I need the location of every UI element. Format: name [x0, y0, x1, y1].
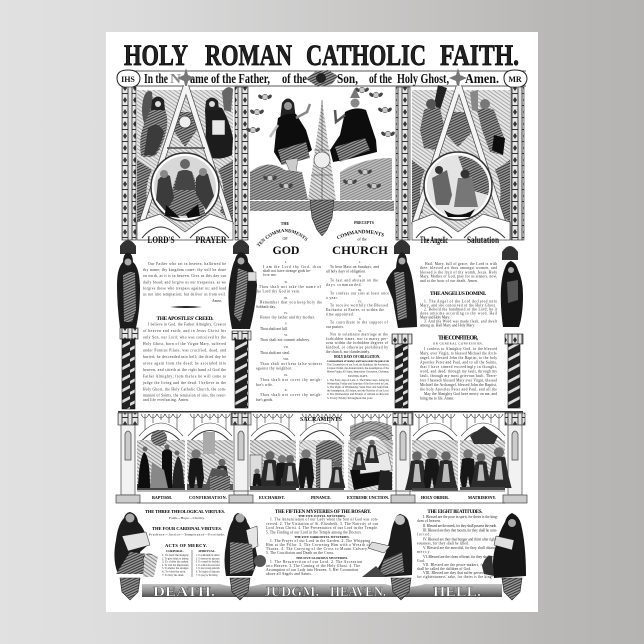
title [124, 39, 519, 72]
cloud of cherubs right [340, 158, 392, 200]
text: Hail Mary: and at the hour of our death. Amen. [420, 279, 478, 283]
text: beatitudes: II. Blessed are the meek, for they shall possess the earth. [423, 524, 497, 529]
scene: Eucharist [250, 414, 300, 490]
text: Hail Mary: thee; blessed art thou amongst women, and [420, 266, 497, 271]
label: Penance: PENANCE. [311, 495, 331, 500]
text: Acts of Mercy columns: 6. To forgive all injuries. [196, 570, 220, 574]
text: Lord's Prayer: Our Father who art in heaven, hallowed be [148, 262, 226, 267]
text: Lord's Prayer: thy name; thy kingdom come; thy will be done [143, 268, 226, 272]
statue: right bishop [386, 252, 417, 328]
text: holy days: 5. Every Friday throughout the year. [327, 396, 373, 400]
text: Apostles' Creed: buried; he descended into hell; the third day he [143, 355, 226, 359]
text: Confiteor [420, 347, 498, 400]
text: precepts of the Church: days commanded. [326, 283, 362, 287]
invocation line: of the [282, 72, 307, 87]
text: Apostles' Creed: and life everlasting. Amen. [143, 398, 189, 402]
emblem: MR medallion: MR [508, 75, 522, 84]
invocation line: N [170, 72, 181, 87]
banner: Last Things [120, 578, 522, 600]
lace band [250, 201, 394, 211]
scene: Confirmation [187, 414, 233, 490]
text: Confiteor: May the Almighty God have mercy on me, and [424, 392, 497, 397]
text: Angelus: Mary and Holy Mary. [420, 316, 450, 320]
invocation line: In the [144, 72, 168, 87]
text: Angelus: done unto me according to thy word. Hail [420, 312, 497, 316]
roundel: holy family [151, 153, 219, 221]
text: precepts of the Church: kindred, or otherwise prohibited by [326, 346, 388, 350]
text: Lord's Prayer [143, 262, 227, 303]
text: Apostles' Creed: under Pontius Pilate, was crucified, dead, and [143, 348, 226, 354]
figure: evangelist Luke [362, 514, 412, 577]
text: Acts of Mercy columns: 7. To pray for the living. [196, 573, 218, 577]
text: commandments: Thou shalt not covet thy neigh- [260, 378, 323, 382]
text: commandments [256, 260, 323, 402]
text: commandments: Thou shalt not bear false witness [260, 362, 323, 366]
text: Lord's Prayer: on earth, as it is in heaven. Give us this day our [143, 274, 227, 279]
text: commandments: I. [285, 260, 287, 264]
text: commandments: VIII. [283, 357, 289, 361]
heading: Acts of Mercy: ACTS OF MERCY. [165, 543, 207, 548]
text: sorrowful mysteries [266, 535, 371, 555]
text: holy days: 1. The Forty days of Lent. 2. The Ember days, being the [327, 378, 390, 382]
text: commandments: fore me. [263, 273, 277, 277]
text: beatitudes: mercy. [417, 550, 431, 554]
heading: Three Theological Virtues: THE THREE THEOLOGICAL VIRTUES. [145, 509, 225, 514]
text: Lord's Prayer: forgive those who trespass against us; and lead [143, 286, 226, 290]
text: commandments: III. [284, 296, 288, 300]
text: Confiteor: Apostles Peter and Paul, and to all the Saints, [420, 360, 497, 366]
text: beatitudes: I. Blessed are the poor in spirit, for theirs is the king- [423, 515, 499, 520]
text: holy days: Corpus Christi, the Annunciation, the Assumption of the [327, 366, 390, 370]
text: beatitudes: III. Blessed are they that mourn, for they shall be com- [423, 528, 498, 534]
text: sorrowful mysteries: Him at the Pillar. 3. The Crowning Him with a Wreath of [266, 543, 371, 547]
title: CATHOLIC [306, 39, 426, 72]
text: commandments: I am the Lord thy God, thou [263, 265, 321, 270]
heading: Ten Commandments of God: THE [281, 221, 290, 226]
text: glorious mysteries: Assumption of our Lady into Heaven. 5. Her Coronation [266, 568, 358, 572]
text: beatitudes: VIII. Blessed are they that suffer persecution [423, 571, 491, 575]
pillar: outer right [511, 87, 524, 240]
text: precepts of the Church: a year. [326, 296, 338, 300]
text: Apostles' Creed: only Son, our Lord; who was conceived by the [143, 336, 226, 340]
ornament: shield 4 [502, 578, 522, 600]
title: HOLY [124, 39, 188, 72]
heading: Precepts of the Church: of the [357, 236, 367, 242]
label: Eucharist: EUCHARIST. [259, 495, 285, 500]
text: Angelus: 2. Behold the handmaid of the Lord; be it [424, 308, 497, 312]
angel: right [205, 87, 233, 159]
panel: right gable, Angelic Salutation [396, 85, 524, 246]
text: precepts of the Church: II. [359, 274, 362, 278]
text: beatitudes [417, 515, 499, 580]
text: Apostles' Creed: heaven, and sitteth at the right hand of God the [143, 368, 226, 373]
text: joyful mysteries: Lord Jesus Christ. 4. The Presentation of our Lord in the Temple. [266, 526, 378, 530]
text: Apostles' Creed: of heaven and earth; and in Jesus Christ his [143, 329, 227, 333]
text: Confiteor: the holy Apostles Peter and Paul, and all the [420, 388, 497, 392]
text: Apostles' Creed: munion of Saints, the remission of sins, the resur- [143, 394, 227, 398]
heading: The Confiteor: THE CONFITEOR, [438, 336, 478, 342]
text: precepts of the Church: Eucharist at Easter, or within the [326, 308, 384, 313]
text: joyful mysteries: 5. The Finding of our Lord in the Temple among the Doctors. [266, 530, 362, 534]
heading: Four Cardinal Virtues: THE FOUR CARDINAL VIRTUES. [152, 526, 222, 531]
text: commandments: Thou shalt not kill. [260, 327, 288, 331]
text: Acts of Mercy columns: 3. To counsel the doubtful. [196, 560, 220, 564]
text: sorrowful mysteries: Thorns. 4. The Carrying of the Cross to Mount Calvary. [266, 547, 368, 551]
text: glorious mysteries: into Heaven. 3. The Coming of the Holy Ghost. 4. The [266, 564, 360, 568]
cloud border arc [252, 88, 392, 202]
label: Salutation: Salutation [467, 236, 500, 246]
heading: Eight Beatitudes: THE EIGHT BEATITUDES. [428, 510, 482, 515]
text: Confiteor: that I have sinned exceedingly in thought, [420, 365, 497, 370]
spire: centre [308, 100, 336, 200]
text: beatitudes: forted. [417, 532, 431, 536]
tracery: corners [137, 160, 233, 222]
text: Angelus: 3. And the Word was made flesh, and dwelt [424, 320, 497, 324]
heading: Ten Commandments of God: TEN COMMANDMENTS [256, 228, 308, 247]
heading: The Angelus Domini: THE ANGELUS DOMINI. [430, 291, 487, 297]
subheading: general confession: OR GENERAL CONFESSION. [433, 342, 483, 346]
text: Confiteor: fore I beseech blessed Mary ever Virgin, blessed [420, 378, 497, 384]
central quatrefoil [173, 112, 197, 147]
text: Lord's Prayer: Amen. [212, 299, 222, 303]
ornament: star right [449, 68, 467, 90]
text: commandments: Thou shalt not covet thy neigh- [260, 393, 323, 397]
text: commandments: V. [285, 322, 288, 326]
text: Heaven: HEAVEN. [330, 585, 386, 600]
figure: God the Father [330, 88, 377, 162]
text: Hell: HELL. [433, 585, 481, 600]
text: Hail Mary: blessed is the fruit of thy womb, Jesus. Holy [420, 270, 497, 275]
text: precepts of the Church: To contribute to the support of [330, 320, 389, 324]
text: joyful mysteries: ceived. 2. The Visitation of St. Elizabeth. 3. The Nativity of our [266, 522, 379, 526]
text: commandments: IX. [284, 373, 288, 377]
ornament: star left [177, 68, 195, 90]
text: commandments: bor's goods. [256, 398, 273, 402]
scene: Holy Orders [405, 414, 458, 490]
column: fourth [505, 334, 523, 408]
invocation line: Son, [337, 72, 358, 87]
text: holy days: 4. The Wednesdays and Fridays of Advent as directed. [327, 392, 389, 396]
gable: A frame [141, 86, 231, 225]
lower lace arches [412, 214, 510, 240]
text: commandments: IV. [284, 311, 288, 315]
text: Acts of Mercy columns: 5. To shelter the stranger. [162, 566, 189, 570]
text: commandments: bor's wife. [256, 383, 273, 387]
scene: Baptism [137, 414, 185, 490]
text: beatitudes: for righteousness' sake, for theirs is the king- [417, 575, 494, 580]
angel: left [420, 85, 447, 150]
text: precepts of the Church: To confess our sins at least once [330, 292, 389, 296]
text: Apostles' Creed: arose again from the dead; he ascended into [143, 362, 226, 366]
caption rule [137, 491, 505, 503]
text: precepts of the Church: To receive worthily the Blessed [330, 304, 388, 308]
heading: Precepts of the Church: CHURCH [332, 245, 388, 257]
text: precepts of the Church: the church, nor clandestinely. [326, 350, 370, 355]
text: Acts of Mercy columns: 2. To instruct the ignorant. [196, 556, 220, 560]
text: Confiteor: fault, through my most grievous fault. There- [420, 374, 498, 379]
text: Confiteor: angel, to blessed John the Baptist, to the holy [420, 356, 497, 361]
text: precepts of the Church: all holy days of obligation. [326, 270, 366, 274]
text: holy days: the Assumption, All Saints, and the Nativity of our Lord. [327, 388, 389, 392]
text: holy days: The Circumcision of our Lord, the Epiphany, the Ascension, [327, 362, 389, 366]
text: Acts of Mercy columns: 2. To give drink to thirsty. [162, 556, 189, 560]
angel: right [470, 90, 505, 155]
text: Apostles' Creed: Father Almighty; from thence he will come to [143, 374, 226, 378]
pillar: inner left [235, 87, 248, 240]
text: precepts of the Church: III. [358, 288, 362, 292]
invocation line: of the [369, 72, 392, 87]
text: holy days: 3. The Vigils of Whitsunday, Saint Peter and Saint Paul, [327, 385, 389, 389]
central quatrefoil [444, 112, 472, 147]
text: Angelus: among us. Hail Mary and Holy Mary. [420, 324, 475, 328]
text: commandments: II. [285, 280, 288, 284]
text: commandments: Thou shalt not take the name of [259, 285, 322, 289]
text: commandments: Thou shalt not steal. [260, 351, 290, 355]
figure: evangelist John [482, 513, 526, 578]
text: precepts of the Church: V. [359, 317, 362, 321]
text: Apostles' Creed: I believe in God, the Father Almighty, Creator [148, 322, 227, 328]
divider flourish [170, 306, 202, 308]
text: commandments: Thou shalt not commit adultery. [260, 338, 310, 342]
text: Angelus [420, 300, 497, 328]
background lace [137, 90, 233, 240]
text: Hail Mary [420, 262, 497, 283]
text: Apostles' Creed: judge the living and the dead. I believe in the [142, 381, 226, 385]
text: commandments: the Lord thy God in vain. [256, 290, 300, 294]
text: Angelus: Mary, and she conceived of the Holy Ghost. [420, 304, 496, 308]
text: precepts of the Church: To fast and abstain on the [330, 278, 378, 282]
label: Matrimony: MATRIMONY. [468, 495, 496, 500]
text: precepts of the Church: time appointed. [326, 312, 354, 316]
text: glorious mysteries [266, 556, 362, 576]
text: virtues: Faith—Hope—Charity. [169, 516, 205, 520]
text: Confiteor: Mary, ever Virgin, to blessed Michael the Arch- [420, 352, 498, 356]
tracery: corners [412, 160, 510, 222]
text: Death: DEATH. [153, 585, 215, 600]
pillar: outer left [122, 87, 136, 240]
scene: Matrimony [460, 414, 512, 490]
text: Confiteor: I confess to Almighty God, to the blessed [424, 347, 497, 352]
heading: Holy Days of Obligation: HOLY DAYS OF OBLIGATION. [334, 355, 380, 359]
heading: Fifteen Mysteries of the Rosary: THE FIFTEEN MYSTERIES OF THE ROSARY. [275, 510, 371, 515]
text: Acts of Mercy columns: 1. To feed the hungry. [162, 553, 189, 557]
architecture: columns [116, 413, 527, 503]
text: holy days [327, 359, 390, 400]
text: Acts of Mercy columns: 7. To bury the dead. [162, 573, 184, 577]
heading: The Apostles' Creed: THE APOSTLES' CREED. [156, 316, 214, 322]
text: Confiteor: bring me to life. Amen. [420, 396, 454, 400]
panel: sacraments band [116, 411, 527, 503]
roundel: Annunciation [424, 152, 492, 220]
text: holy days: FASTING DAYS. [348, 374, 368, 378]
heading: Ten Commandments of God [256, 221, 308, 257]
scene: Penance [298, 414, 345, 490]
emblem: IHS medallion [117, 70, 140, 88]
text: glorious mysteries: above all Angels and Saints. [266, 572, 312, 576]
text: precepts of the Church: forbidden times, nor to marry per- [326, 337, 389, 342]
invocation line: ame of the Father, [190, 72, 270, 87]
label: Extreme Unction: EXTREME UNCTION. [347, 495, 389, 500]
heading: Precepts of the Church: COMMANDMENTS [337, 230, 384, 239]
text: sorrowful mysteries: THE FIVE SORROWFUL MYSTERIES. [294, 535, 350, 539]
text: beatitudes: IV. Blessed are they that hunger and thirst after right- [423, 538, 498, 542]
text: beatitudes: VI. Blessed are the clean of heart, for they shall see [423, 555, 495, 560]
label: Holy Orders: HOLY ORDER. [421, 495, 449, 500]
text: sorrowful mysteries: 1. The Prayer of our Lord in the Garden. 2. The Whipping [270, 539, 370, 543]
text: Apostles' Creed: Holy Ghost, born of the Virgin Mary, suffered [143, 342, 226, 347]
text: Acts of Mercy columns: 4. To comfort the sorrowful. [196, 563, 220, 567]
cherub ring [246, 87, 395, 137]
text: beatitudes: dom of heaven. [417, 519, 441, 523]
text: joyful mysteries: 1. The Annunciation of our Lady when the Son of God was con- [270, 518, 379, 522]
text: beatitudes: eousness, for they shall be filled. [417, 542, 469, 546]
text: precepts of the Church [326, 260, 389, 355]
text: Hail Mary: Mary, Mother of God, pray for us sinners, now, [420, 275, 497, 280]
emblem: MR medallion [504, 70, 527, 88]
cloud of cherubs left [250, 164, 308, 200]
text: commandments: against thy neighbor. [256, 366, 292, 370]
text: precepts of the Church: Not to solemnize marriage at the [330, 332, 388, 336]
heading: Precepts of the Church: PRECEPTS [354, 221, 374, 225]
text: commandments: Sabbath day. [256, 305, 276, 309]
text: precepts of the Church: IV. [358, 300, 362, 304]
text: precepts of the Church: I. [359, 260, 361, 264]
text: Acts of Mercy columns: 6. To visit the sick. [162, 570, 186, 574]
text: commandments: Honor thy father and thy mother. [260, 316, 315, 320]
text: beatitudes: God. [417, 559, 425, 563]
scene: Extreme Unction [348, 414, 393, 490]
title: ROMAN [205, 39, 292, 72]
text: Acts of Mercy columns: CORPORAL. [166, 549, 184, 553]
text: joyful mysteries [266, 514, 379, 534]
title: FAITH. [440, 39, 519, 72]
ornament: shield 1 [120, 578, 140, 600]
heading: Ten Commandments of God: OF [282, 236, 288, 241]
text: beatitudes: VII. Blessed are the peace-makers, for they [423, 563, 493, 568]
text: precepts of the Church: our pastors. [326, 325, 344, 329]
white gaps [142, 581, 502, 587]
statue: right Madonna [501, 261, 523, 327]
ornament: shield 3 [391, 578, 411, 600]
label: Sacraments: SACRAMENTS [300, 416, 342, 423]
text: Angelus: 1. The Angel of the Lord declared unto [424, 300, 497, 304]
text: joyful mysteries: THE FIVE JOYFUL MYSTERIES. [298, 514, 346, 518]
angel: left [140, 91, 167, 157]
top frieze [118, 411, 523, 412]
label: Prayer: PRAYER [196, 236, 227, 246]
text: Acts of Mercy columns [162, 549, 220, 577]
text: commandments: Remember that you keep holy the [260, 300, 322, 304]
invocation line [122, 71, 526, 87]
text: holy days: Commandment of Sundays and Feasts under the pain of sin [327, 359, 389, 363]
poster sheet [106, 32, 538, 612]
figure: evangelist Matthew [114, 512, 158, 577]
text: beatitudes: V. Blessed are the merciful, for they shall obtain [423, 546, 495, 551]
text: beatitudes: shall be called the children of God. [417, 567, 471, 571]
text: Judgment: JUDGM. [264, 585, 319, 600]
statue: left bishop [117, 252, 140, 328]
text: glorious mysteries: THE FIVE GLORIOUS MYSTERIES. [296, 556, 348, 560]
emblem: IHS medallion: IHS [121, 75, 135, 84]
text: Lord's Prayer: daily bread; and forgive us our trespasses, as we [143, 280, 226, 286]
label: The Angelic: The Angelic [420, 236, 448, 246]
label: Baptism: BAPTISM. [152, 495, 172, 500]
text: commandments: VI. [284, 333, 288, 337]
text: sorrowful mysteries: 5. The Crucifixion and Death on the Cross. [266, 551, 334, 555]
text: precepts of the Church: sons within the forbidden degrees of [326, 341, 389, 345]
text: Confiteor: word, and deed, through my fault, through my [420, 370, 497, 374]
gable: A frame [414, 86, 504, 225]
text: Apostles' Creed: Holy Ghost, the Holy Catholic Church, the com- [143, 388, 227, 392]
text: Acts of Mercy columns: SPIRITUAL. [198, 549, 216, 553]
canopy: statue niches [120, 240, 518, 260]
label: Confirmation: CONFIRMATION. [189, 495, 227, 500]
ornament: central dove [306, 70, 338, 87]
heading: Ten Commandments of God: GOD [272, 243, 300, 257]
ornament: shield 2 [230, 578, 250, 600]
text: Acts of Mercy columns: 3. To clothe the naked. [162, 560, 189, 564]
text: Confiteor: Michael the Archangel, blessed John the Baptist, [420, 383, 497, 388]
column: third [392, 334, 412, 408]
text: precepts of the Church: To hear Mass on Sundays, and [330, 265, 379, 270]
label: Lord's: LORD'S [148, 236, 174, 246]
text: Acts of Mercy columns: 5. To bear wrongs patiently. [196, 566, 220, 570]
invocation line: Amen. [465, 72, 499, 87]
text: Apostles' Creed [142, 322, 227, 402]
heading: Precepts of the Church [332, 221, 388, 257]
text: commandments: X. [285, 388, 288, 392]
column: second [232, 331, 251, 408]
text: holy days: Wednesday, Friday and Saturday of the first week in Lent. [327, 382, 389, 386]
figure: Christ [270, 98, 312, 172]
text: Acts of Mercy columns: 1. To admonish the sinner. [196, 553, 220, 557]
text: Acts of Mercy columns: 4. To visit the imprisoned. [162, 563, 189, 567]
panel: central heaven scene [246, 87, 395, 236]
text: commandments: shalt not have strange gods be- [263, 269, 312, 273]
panel: left gable, Lord's Prayer [122, 86, 248, 246]
text: holy days: Blessed Virgin, All Saints, Immaculate Conception, Christmas, [327, 370, 389, 374]
invocation line: Holy Ghost, [397, 72, 449, 87]
text: Lord's Prayer: us not into temptation; but deliver us from evil. [143, 292, 226, 296]
statue: left saint [228, 252, 257, 329]
ornament: central bust [310, 200, 334, 236]
text: commandments: VII. [284, 345, 289, 349]
lower lace arches [137, 214, 233, 240]
column: first [120, 328, 138, 409]
pillar: inner right [396, 87, 410, 240]
text: glorious mysteries: 1. The Resurrection of our Lord. 2. The Ascension [270, 560, 362, 564]
text: precepts of the Church: VI. [358, 329, 362, 333]
text: cardinal virtues: Prudence—Justice—Temperance—Fortitude. [149, 532, 225, 536]
text: Hail Mary: Hail, Mary, full of grace; the Lord is with [425, 262, 497, 267]
figure: evangelist Mark [224, 513, 266, 576]
